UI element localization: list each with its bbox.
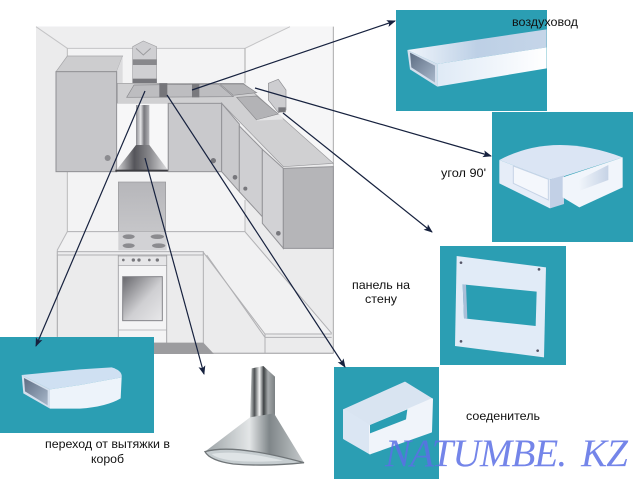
label: воздуховод: воздуховод [512, 15, 578, 29]
tall left cabinet [56, 56, 123, 172]
label: переход от вытяжки в короб [45, 437, 170, 466]
label: соеденитель: соеденитель [466, 409, 540, 423]
icon: elbow duct [499, 145, 623, 208]
oven [118, 255, 167, 343]
label: панель на стену: панель на [352, 278, 410, 292]
kitchen line drawing [36, 27, 333, 354]
panel: connector (соеденитель) [334, 367, 439, 479]
label: переход от вытяжки в короб: переход от вытяжки в [45, 437, 170, 451]
cabinet tops and ducts [117, 79, 333, 167]
icon: transition adapter [22, 367, 122, 409]
label: переход от вытяжки в короб: короб [91, 452, 124, 466]
icon: stainless chimney hood [205, 366, 304, 465]
icon: wall plate with rectangular opening [455, 256, 546, 357]
wall vent with duct stub [133, 41, 157, 83]
panel: hood to duct transition [0, 337, 154, 433]
panel: 90 degree elbow [492, 112, 633, 242]
label: панель на стену: стену [365, 292, 397, 306]
arrow: to duct [192, 21, 395, 90]
arrow: to wall plate [283, 113, 432, 232]
panel: duct (воздуховод) [396, 10, 547, 111]
cabinet knobs [211, 158, 281, 236]
icon: rectangular air duct [407, 29, 547, 87]
arrow: to transition [36, 91, 145, 346]
floor shadow [152, 343, 214, 354]
arrow: to elbow [255, 88, 491, 156]
label: панель на стену [352, 278, 410, 306]
base cabinets and counter [57, 232, 332, 353]
arrow: to connector [167, 95, 345, 367]
label: угол 90: угол 90' [441, 166, 486, 180]
stove splashback and hob [57, 182, 332, 353]
room walls [36, 27, 333, 353]
watermark: NATUMBE. KZ [384, 432, 629, 475]
icon: rectangular connector [344, 383, 432, 453]
panel: wall plate (панель на стену) [440, 246, 566, 365]
arrow: to hood [145, 158, 204, 374]
upper cabinets [168, 103, 333, 248]
range hood [115, 103, 169, 172]
